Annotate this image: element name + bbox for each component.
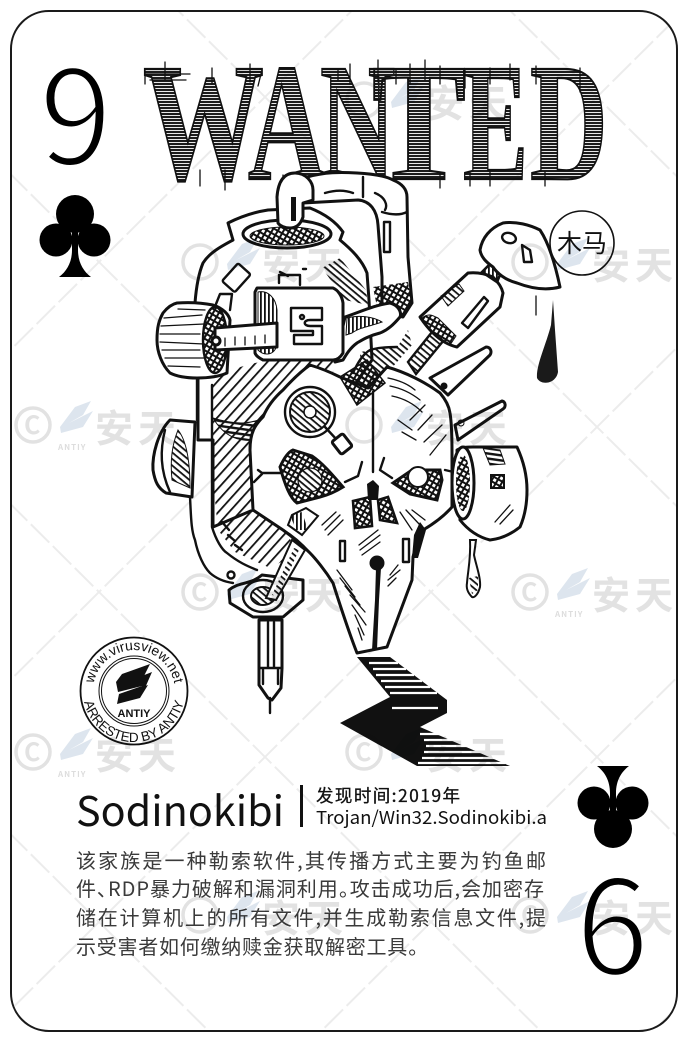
title: WANTED: T bbox=[372, 30, 466, 216]
watermarks: C bbox=[191, 573, 207, 609]
watermarks: 安天 bbox=[95, 725, 181, 780]
watermarks: ANTIY bbox=[554, 609, 583, 620]
icon: club suit bottom bbox=[578, 766, 648, 848]
watermarks: ANTIY bbox=[57, 769, 86, 780]
description: 储在计算机上的所有文件,并生成勒索信息文件,提 bbox=[76, 902, 546, 931]
title: WANTED: E bbox=[463, 30, 528, 216]
title: WANTED: N bbox=[320, 30, 395, 216]
title: WANTED bbox=[143, 29, 608, 216]
watermarks: 安天 bbox=[262, 235, 348, 290]
lightning base bbox=[340, 657, 510, 766]
right wheel bbox=[452, 447, 527, 540]
rank: 6: 9 bbox=[576, 839, 649, 1030]
skull right eye bbox=[380, 458, 462, 500]
stamp: ANTIY seal: ARRESTED BY ANTIY bbox=[84, 700, 183, 742]
wheel drip bbox=[467, 540, 480, 597]
watermarks: 安天 bbox=[262, 565, 348, 620]
divider bbox=[300, 785, 303, 827]
tank body bbox=[190, 208, 372, 583]
watermarks: C bbox=[521, 896, 537, 932]
watermarks: 安天 bbox=[426, 73, 512, 128]
title: WANTED: A bbox=[248, 29, 326, 216]
watermarks: C bbox=[24, 733, 40, 769]
description: 件、RDP暴力破解和漏洞利用。攻击成功后,会加密存 bbox=[76, 873, 544, 902]
icon: trojan badge bbox=[550, 211, 614, 275]
tool handle bbox=[408, 262, 503, 374]
description bbox=[76, 845, 546, 960]
title: WANTED: W bbox=[143, 30, 264, 216]
black drop bbox=[536, 296, 558, 383]
stamp: ANTIY seal: ANTIY bbox=[118, 708, 151, 720]
malware name: Trojan/Win32.Sodinokibi.a bbox=[316, 804, 547, 830]
pipe bbox=[303, 172, 412, 317]
bulb head bbox=[480, 222, 560, 289]
skull left eye bbox=[254, 450, 362, 503]
description: 该家族是一种勒索软件,其传播方式主要为钓鱼邮 bbox=[76, 845, 546, 874]
watermarks: 安天 bbox=[592, 888, 678, 943]
left lower knob bbox=[153, 420, 195, 497]
title: WANTED: D bbox=[530, 29, 608, 216]
watermarks: 安天 bbox=[426, 725, 512, 780]
skull nose bbox=[353, 480, 397, 528]
watermarks: C bbox=[24, 406, 40, 442]
icon: trojan badge: 木马 bbox=[557, 224, 607, 260]
watermarks: C bbox=[521, 573, 537, 609]
rank: 9: 9 bbox=[39, 13, 112, 204]
stamp: ANTIY seal bbox=[80, 636, 188, 746]
discovery date: 发现时间:2019年 bbox=[316, 783, 460, 808]
pipe cap bbox=[277, 173, 313, 228]
stamp: ANTIY seal: www.virusview.net bbox=[86, 642, 183, 684]
watermarks: 安天 bbox=[262, 888, 348, 943]
watermarks: 安天 bbox=[592, 235, 678, 290]
skull mouth bbox=[370, 522, 426, 650]
skull crack and teeth bbox=[288, 508, 425, 640]
description: 示受害者如何缴纳赎金获取解密工具。 bbox=[76, 931, 418, 960]
watermarks: C bbox=[355, 733, 371, 769]
skull bbox=[250, 360, 462, 653]
gear dial bbox=[285, 387, 352, 455]
tank top ring bbox=[243, 220, 331, 248]
watermarks: ANTIY bbox=[57, 442, 86, 453]
watermarks: 安天 bbox=[95, 398, 181, 453]
watermarks: 安天 bbox=[426, 398, 512, 453]
fins bbox=[430, 347, 505, 440]
tank box with 9 bbox=[212, 288, 343, 360]
illustration: trojan machine skull bbox=[153, 172, 560, 766]
top left knob bbox=[157, 303, 230, 378]
watermarks: 安天 bbox=[592, 565, 678, 620]
handle tube bbox=[335, 303, 412, 390]
bottom ring and pen bbox=[228, 540, 305, 713]
name: Sodinokibi: Sodinokibi bbox=[76, 778, 284, 838]
icon: club suit top bbox=[40, 195, 110, 277]
